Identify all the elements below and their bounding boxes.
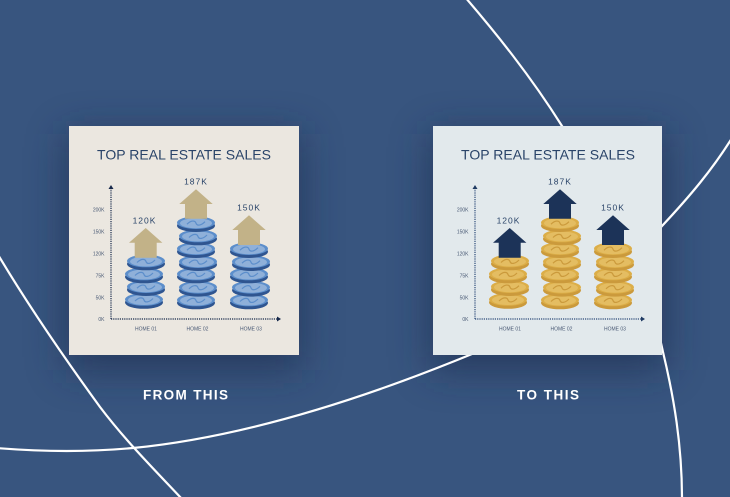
y axis labels: 150K — [457, 230, 469, 236]
coin stack: home 03 — [230, 242, 270, 309]
panel: from this — [69, 126, 299, 355]
y axis labels: 50K — [460, 296, 469, 302]
x axis labels — [135, 326, 262, 332]
value labels: 120K — [497, 216, 520, 226]
value labels: 187K — [548, 177, 572, 187]
value labels — [497, 177, 625, 226]
y axis labels: 75K — [96, 274, 105, 280]
value labels: 150K — [237, 202, 261, 212]
y axis labels: 0K — [462, 317, 469, 323]
x axis labels: HOME 02 — [187, 326, 209, 332]
x axis labels: HOME 02 — [551, 326, 573, 332]
coin stack: home 02 — [177, 216, 217, 309]
x axis labels: HOME 03 — [240, 326, 262, 332]
x axis labels: HOME 01 — [135, 326, 157, 332]
y axis labels: 75K — [460, 274, 469, 280]
coin stack: home 01 — [489, 255, 529, 309]
panel: to this — [433, 126, 662, 355]
x axis labels: HOME 01 — [499, 326, 521, 332]
y axis labels — [93, 208, 105, 323]
value labels: 187K — [184, 177, 208, 187]
heading: TOP REAL ESTATE SALES — [461, 146, 635, 162]
axes — [108, 185, 281, 322]
value labels — [133, 177, 261, 226]
y axis labels: 50K — [96, 296, 105, 302]
heading: TOP REAL ESTATE SALES — [97, 146, 271, 162]
coin stack: home 01 — [125, 255, 165, 309]
axes — [472, 185, 645, 322]
value labels: 120K — [133, 216, 156, 226]
y axis labels: 120K — [93, 252, 105, 258]
x axis labels — [499, 326, 626, 332]
card shadows — [66, 134, 666, 370]
y axis labels: 120K — [457, 252, 469, 258]
coin stack: home 02 — [541, 216, 581, 309]
y axis labels: 150K — [93, 230, 105, 236]
y axis labels: 0K — [98, 317, 105, 323]
value labels: 150K — [601, 202, 625, 212]
arrows — [493, 189, 630, 258]
caption: from this: FROM THIS — [143, 388, 228, 402]
coin stack: home 03 — [594, 242, 634, 309]
y axis labels: 200K — [457, 208, 469, 214]
y axis labels — [457, 208, 469, 323]
y axis labels: 200K — [93, 208, 105, 214]
caption: to this: TO THIS — [517, 388, 579, 402]
arrows — [129, 189, 266, 258]
x axis labels: HOME 03 — [604, 326, 626, 332]
